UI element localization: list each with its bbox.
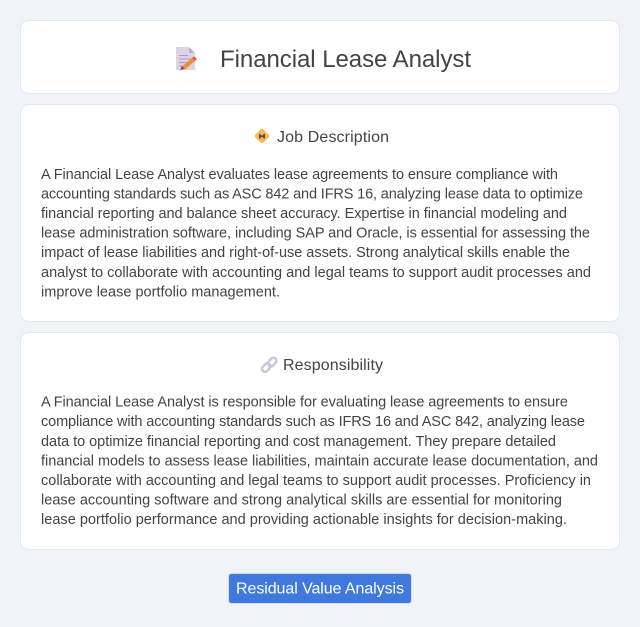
icon: chain link	[261, 356, 278, 373]
title: Financial Lease Analyst	[220, 46, 471, 73]
text block: job description: lease administration software, including SAP and Oracle, is essential for assessing the	[41, 226, 590, 242]
text block: job description: A Financial Lease Analyst evaluates lease agreements to ensure compliance with	[41, 167, 558, 183]
text block: responsibility: lease portfolio performance and providing actionable insights for decision-making.	[41, 512, 567, 528]
text block: job description: financial reporting and balance sheet accuracy. Expertise in financial modeling and	[41, 206, 567, 222]
text block: job description: analyst to collaborate with accounting and legal teams to support audit processes and	[41, 265, 591, 281]
icon: memo with pencil	[176, 47, 197, 70]
heading: job description: Job Description	[277, 129, 389, 146]
panel: title card	[20, 20, 620, 94]
panel: job description	[20, 104, 620, 322]
panel: responsibility	[20, 332, 620, 550]
icon: orange diamond	[254, 128, 270, 144]
text block: job description: improve lease portfolio management.	[41, 284, 280, 300]
button: residual value analysis: Residual Value Analysis	[236, 580, 404, 598]
text block: job description	[41, 167, 591, 300]
text block: job description: impact of lease liabilities and right-of-use assets. Strong analytical skills enable the	[41, 245, 570, 261]
text block: responsibility: compliance with accounting standards such as IFRS 16 and ASC 842, analyzing lease	[41, 414, 585, 430]
text block: job description: accounting standards such as ASC 842 and IFRS 16, analyzing lease data to optimize	[41, 186, 583, 202]
text block: responsibility: data to optimize financial reporting and cost management. They prepare detailed	[41, 434, 556, 450]
text block: responsibility: lease accounting software and strong analytical skills are essential for monitoring	[41, 493, 562, 509]
heading: responsibility: Responsibility	[283, 357, 383, 374]
text block: responsibility: collaborate with accounting and legal teams to support audit processes. Proficiency in	[41, 473, 591, 489]
text block: responsibility: financial models to assess lease liabilities, maintain accurate lease documentation, and	[41, 453, 598, 469]
button: residual value analysis	[228, 574, 412, 604]
text block: responsibility	[41, 395, 598, 528]
text block: responsibility: A Financial Lease Analyst is responsible for evaluating lease agreements to ensure	[41, 395, 568, 411]
